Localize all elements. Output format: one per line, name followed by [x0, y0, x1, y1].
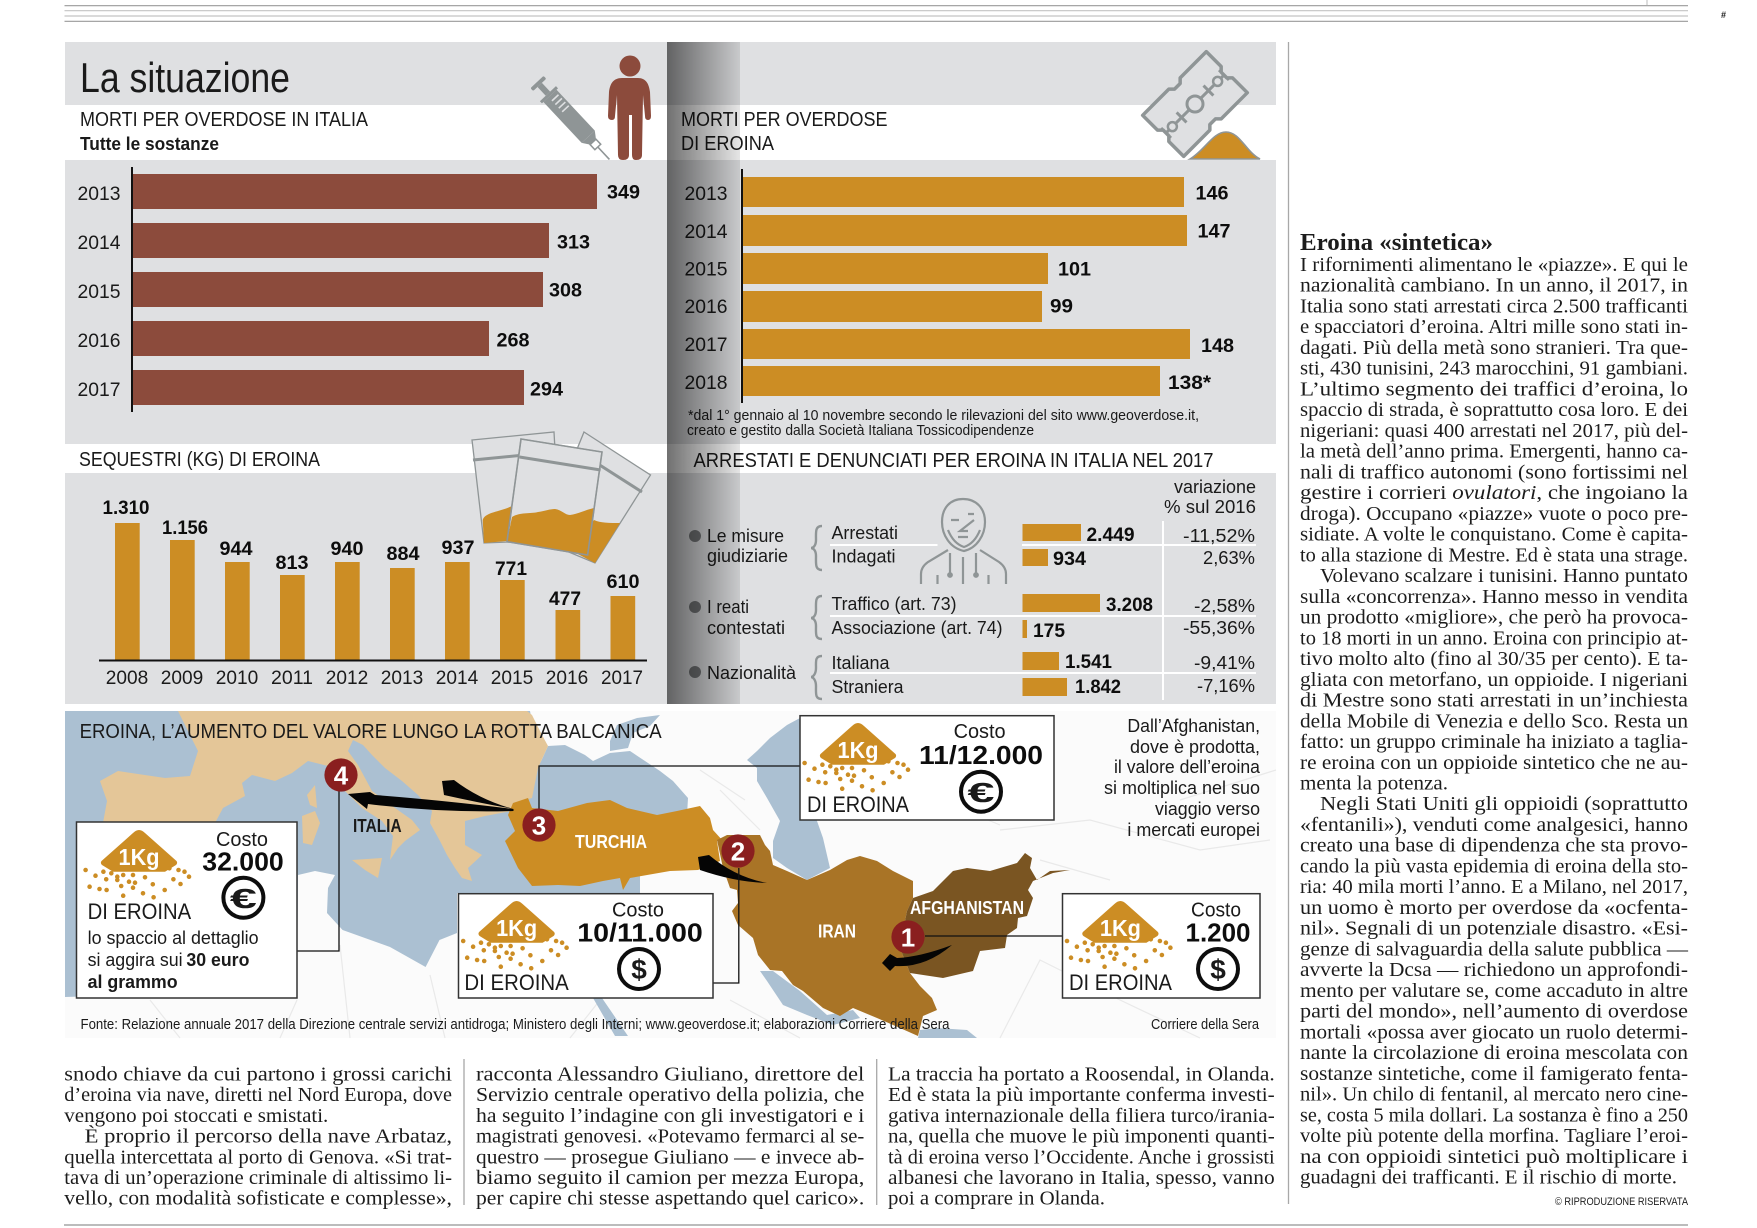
table: arrests bars and variations: 934: [1053, 549, 1086, 570]
article column 1: vello, con modalità sofisticate e complesse»,: [64, 1188, 452, 1210]
map explanatory text: Dall’Afghanistan,: [1127, 715, 1260, 736]
icon: powder pile: [463, 901, 567, 968]
icon: dollar: [619, 949, 659, 989]
article body: nil». Un chilo di fentanil, al mercato nero cine-: [1300, 1084, 1688, 1106]
article column 1: d’eroina via nave, diretti nel Nord Europa, dove: [64, 1084, 452, 1106]
article body: nil». Segnali di un potenziale disastro. «Esi-: [1300, 918, 1688, 940]
map explanatory text: il valore dell’eroina: [1114, 756, 1261, 777]
step markers: 2: [731, 836, 745, 866]
article body: sulla «concorrenza». Hanno messo in vendita: [1300, 586, 1688, 608]
heading: heroin deaths: [681, 109, 888, 155]
icon: euro: [223, 878, 263, 918]
icon: powder pile: 1Kg: [118, 844, 160, 870]
callout: Italy price: Costo: [216, 829, 268, 851]
legend: bullets and categories: Nazionalità: [707, 662, 797, 683]
bar chart: seizures: 2014: [436, 667, 478, 689]
icon: powder pile: 1Kg: [1100, 915, 1141, 941]
bar chart: deaths all substances: 308: [549, 280, 582, 302]
bar chart: deaths all substances: 294: [530, 380, 563, 400]
bar chart: deaths all substances: 349: [607, 182, 640, 204]
article column 1: [64, 1064, 452, 1210]
article column 1: tava di un’operazione criminale di altissimo li-: [64, 1167, 452, 1189]
article body: cando la più vasta epidemia di eroina della sto-: [1300, 856, 1688, 878]
bar chart: heroin deaths: 148: [1201, 336, 1234, 357]
article column 2: Servizio centrale operativo della polizia, che: [476, 1084, 864, 1106]
callout: Afghanistan price: Costo: [1191, 900, 1241, 922]
article column 4: [1300, 230, 1689, 1208]
copyright line: © RIPRODUZIONE RISERVATA: [1555, 1196, 1689, 1208]
land: Europe: [100, 711, 548, 881]
bar chart: heroin deaths: 2014: [684, 221, 728, 243]
country labels: AFGHANISTAN: [910, 898, 1024, 918]
article body: sostanze sintetiche, come il famigerato fenta-: [1300, 1063, 1688, 1085]
step markers: 4: [334, 760, 349, 790]
article body: mento per valutare se, come accaduto in altre: [1300, 980, 1688, 1002]
table: arrests bars and variations: 2.449: [1086, 525, 1134, 546]
bar chart: deaths all substances: 2016: [78, 330, 120, 352]
table: arrests bars and variations: -2,58%: [1194, 595, 1255, 616]
panel: background of the infographic: [65, 42, 1276, 704]
article body: nali di traffico autonomi (sono fortissimi nel: [1300, 461, 1688, 483]
map explanatory text: si moltiplica nel suo: [1104, 777, 1260, 798]
source line: Corriere della Sera: [1151, 1016, 1260, 1033]
article body: se, costa 5 mila dollari. La sostanza è fino a 250: [1300, 1104, 1688, 1126]
map explanatory text: viaggio verso: [1155, 798, 1260, 819]
article body: mortali «possa aver giocato un ruolo determi-: [1300, 1021, 1688, 1043]
article column 1: snodo chiave da cui partono i grossi carichi: [64, 1064, 452, 1086]
article body: «fentanili»), venduti come analgesici, hanno: [1300, 814, 1688, 836]
bar chart: seizures: 944: [220, 539, 253, 560]
article body: [1300, 254, 1689, 1189]
callout: Turkey price: [800, 716, 1054, 820]
icon: person: [608, 56, 651, 160]
article body: e spacciatori d’eroina. Altri mille sono stati in-: [1300, 316, 1688, 338]
article column 3: Ed è stata la più importante conferma investi-: [888, 1084, 1275, 1106]
article body: L’ultimo segmento dei traffici d’eroina, lo: [1300, 378, 1688, 400]
connector lines: [297, 766, 1062, 983]
callout: Turkey price: Costo: [954, 721, 1006, 743]
country labels: IRAN: [818, 922, 856, 942]
article body: la metà dell’anno prima. Emergenti, hanno ca-: [1300, 441, 1688, 463]
article body: droga). Occupano «piazze» vuote o poco pre-: [1300, 503, 1688, 525]
bar chart: heroin deaths: 2015: [684, 258, 728, 280]
heading: heroin deaths: MORTI PER OVERDOSE: [681, 109, 888, 131]
bar chart: seizures: 1.310: [102, 498, 150, 519]
step markers: 3: [532, 810, 546, 840]
icon: dollar: $: [631, 954, 647, 985]
callout: Afghanistan price: 1.200: [1186, 918, 1250, 948]
callout: Iran price: Costo: [612, 900, 664, 922]
article body: avverte la Dcsa — richiedono un approfondi-: [1300, 959, 1688, 981]
article column 2: questro — prosegue Giuliano — e invece ab-: [476, 1146, 864, 1168]
bar chart: heroin deaths: 147: [1198, 222, 1230, 242]
article body: parti del mondo», nell’aumento di overdose: [1300, 1001, 1688, 1023]
panel: deaths all substances: [78, 56, 651, 412]
callout: Afghanistan price: [1062, 894, 1260, 998]
article body: Negli Stati Uniti gli oppioidi (soprattutto: [1320, 793, 1688, 815]
bar chart: deaths all substances: 2014: [78, 232, 121, 254]
bar chart: seizures: 937: [442, 538, 474, 559]
bar chart: seizures: 2010: [216, 667, 258, 689]
footnote: [687, 407, 1199, 439]
step markers: [324, 758, 925, 954]
table: arrests bars and variations: 2,63%: [1203, 547, 1255, 568]
article column 2: racconta Alessandro Giuliano, direttore del: [476, 1064, 865, 1086]
legend: bullets and categories: giudiziarie: [707, 545, 788, 566]
table: arrests bars and variations: -9,41%: [1194, 652, 1255, 673]
article body: gliata con metorfano, un oppioide. I nigeriani: [1300, 669, 1688, 691]
sea: Caspian: [747, 718, 830, 880]
bar chart: seizures: 2012: [326, 667, 368, 689]
table: arrests bars and variations: -7,16%: [1197, 675, 1255, 696]
bar chart: seizures: [99, 498, 647, 689]
table: arrests bars and variations: 1.842: [1075, 677, 1121, 698]
callout: Iran price: 10/11.000: [577, 918, 703, 948]
legend: bullets and categories: contestati: [707, 617, 785, 638]
bar chart: seizures: 771: [495, 559, 527, 580]
table: arrests bars and variations: 1.541: [1065, 652, 1112, 673]
callout: Iran price: DI EROINA: [464, 970, 569, 995]
bar chart: deaths all substances: 2017: [78, 379, 120, 401]
icon: powder pile: 1Kg: [838, 737, 878, 763]
article body: gestire i corrieri ovulatori , che ingoiano la: [1300, 482, 1688, 504]
bar chart: seizures: 2011: [271, 667, 313, 689]
callout: Italy price: 30 euro: [186, 949, 249, 970]
bar chart: deaths all substances: 268: [496, 330, 530, 352]
article column 2: [476, 1064, 865, 1210]
article body: re eroina con un oppioide sintetico che ne au-: [1300, 752, 1688, 774]
icon: razor blade: [1143, 52, 1260, 159]
land: Iran: [717, 835, 937, 1036]
panel: heroin deaths: [681, 52, 1260, 439]
footnote: *dal 1° gennaio al 10 novembre secondo le rilevazioni del sito www.geoverdose.it,: [688, 407, 1199, 424]
land: Turkey: [505, 798, 723, 890]
heading: arrests: ARRESTATI E DENUNCIATI PER EROINA IN ITALIA NEL 2017: [694, 450, 1214, 472]
callout: Iran price: [458, 894, 713, 998]
panel: map of the Balkan route: [65, 711, 1276, 1038]
heading: deaths in Italy: [80, 109, 369, 154]
table: arrests bars and variations: 3.208: [1106, 595, 1153, 616]
callout: Italy price: 32.000: [202, 847, 284, 877]
icon: euro: €: [968, 777, 995, 808]
callout: Turkey price: DI EROINA: [807, 792, 909, 817]
map heading: EROINA, L’AUMENTO DEL VALORE LUNGO LA ROTTA BALCANICA: [80, 721, 662, 743]
article body: della Mobile di Venezia e dello Sco. Resta un: [1300, 710, 1688, 732]
bar chart: seizures: 2013: [381, 667, 423, 689]
map explanatory text: dove è prodotta,: [1130, 736, 1260, 757]
article body: Volevano scalzare i tunisini. Hanno puntato: [1320, 565, 1688, 587]
article body: sidiate. A volte le conquistano. Come è capita-: [1300, 524, 1688, 546]
article body: to 18 morti in un anno. Eroina con principio at-: [1300, 627, 1688, 649]
icon: powder pile: [1067, 901, 1170, 968]
bar chart: heroin deaths: 138*: [1168, 373, 1212, 394]
panel fold shadow: [667, 42, 740, 704]
icon: syringe: [529, 74, 617, 167]
article heading: Eroina «sintetica»: [1300, 230, 1493, 256]
callout: Turkey price: 11/12.000: [919, 740, 1043, 770]
arrows: [348, 780, 952, 971]
article column 2: biamo seguito il camion per mezza Europa,: [476, 1167, 864, 1189]
heading: heroin deaths: DI EROINA: [681, 133, 775, 155]
article column 3: La traccia ha portato a Roosendal, in Olanda.: [888, 1064, 1275, 1086]
table: arrests bars and variations: 175: [1033, 621, 1065, 642]
article body: sti, 430 tunisini, 243 marocchini, 91 gambiani.: [1300, 358, 1688, 380]
callout: Italy price: si aggira sui: [88, 949, 183, 970]
panel: seizures: [79, 432, 650, 689]
panel: arrests: [689, 450, 1256, 700]
bar chart: heroin deaths: 2018: [684, 372, 728, 394]
step markers: 1: [901, 922, 915, 952]
bar chart: heroin deaths: [684, 169, 1234, 403]
table: arrests bars and variations: [832, 476, 1256, 698]
article column 1: È proprio il percorso della nave Arbataz,: [85, 1125, 452, 1148]
callout: Italy price: DI EROINA: [88, 899, 191, 924]
table: arrests bars and variations: Italiana: [832, 652, 890, 673]
icon: euro: [961, 772, 1001, 812]
table: arrests bars and variations: Arrestati: [832, 522, 898, 543]
article body: un prodotto «migliore», che però ha provoca-: [1300, 607, 1688, 629]
article body: guadagni dei trafficanti. E il rischio di morte.: [1300, 1167, 1677, 1189]
article column 2: per capire chi stesse aspettando quel carico».: [476, 1188, 864, 1210]
bar chart: seizures: 2016: [546, 667, 588, 689]
callout: Italy price: lo spaccio al dettaglio: [88, 927, 259, 948]
bar chart: deaths all substances: 313: [557, 232, 590, 254]
icon: euro: €: [230, 883, 258, 914]
bar chart: heroin deaths: 2016: [684, 296, 728, 318]
footnote: creato e gestito dalla Società Italiana Tossicodipendenze: [687, 422, 1034, 439]
article body: na con oppioidi sintetici può moltiplicare i: [1300, 1146, 1688, 1168]
callout: Italy price: [76, 822, 297, 998]
table: arrests bars and variations: Associazione (art. 74): [832, 617, 1002, 638]
bar chart: deaths all substances: 2015: [78, 281, 121, 303]
article body: Italia sono stati arrestati circa 2.500 trafficanti: [1300, 296, 1688, 318]
article body: genze di salvaguardia della salute pubblica —: [1300, 938, 1689, 960]
bar chart: heroin deaths: 146: [1196, 184, 1228, 204]
country labels: ITALIA: [353, 816, 402, 836]
icon: powder pile: [86, 830, 189, 897]
table: arrests bars and variations: variazione: [1174, 476, 1256, 497]
article column 2: ha seguito l’indagine con gli investigatori e i: [476, 1105, 865, 1127]
bar chart: heroin deaths: 99: [1050, 296, 1073, 318]
map explanatory text: [1104, 715, 1261, 840]
bar chart: seizures: 610: [606, 572, 640, 593]
bar chart: heroin deaths: 2017: [684, 334, 728, 356]
legend: bullets and categories: I reati: [707, 596, 749, 617]
article body: nigeriani: quasi 400 arrestati nel 2017, più del-: [1300, 420, 1688, 442]
bar chart: seizures: 477: [549, 589, 581, 610]
article body: nazionalità cambiano. In un anno, il 2017, in: [1300, 275, 1688, 297]
bar chart: heroin deaths: 101: [1058, 260, 1091, 280]
bar chart: deaths all substances: 2013: [78, 183, 120, 205]
table: arrests bars and variations: -55,36%: [1183, 617, 1255, 638]
bar chart: seizures: 1.156: [162, 518, 208, 539]
article body: I rifornimenti alimentano le «piazze». E qui le: [1300, 254, 1688, 276]
heading: deaths in Italy: Tutte le sostanze: [80, 134, 219, 154]
icon: powder pile: 1Kg: [496, 915, 537, 941]
bar chart: deaths all substances: [78, 167, 640, 412]
table: arrests bars and variations: Traffico (art. 73): [832, 593, 956, 614]
heading: seizures: SEQUESTRI (KG) DI EROINA: [79, 449, 321, 471]
article body: to alla stazione di Mestre. Ed è stata una strage.: [1300, 544, 1688, 566]
bar chart: heroin deaths: 2013: [684, 183, 728, 205]
legend: bullets and categories: [689, 525, 822, 699]
article body: fatto: un gruppo criminale ha iniziato a taglia-: [1300, 731, 1688, 753]
bar chart: seizures: 2015: [491, 667, 533, 689]
bar chart: seizures: 2009: [161, 667, 203, 689]
article column 3: albanesi che lavorano in Italia, spesso, vanno: [888, 1167, 1275, 1189]
article body: menta la potenza.: [1300, 772, 1448, 794]
article column 3: tà di eroina verso l’Occidente. Anche i grossisti: [888, 1146, 1275, 1168]
article body: spaccio di strada, è soprattutto cosa loro. E dei: [1300, 399, 1688, 421]
article body: volte più potente della morfina. Tagliare l’eroi-: [1300, 1125, 1688, 1147]
article column 3: [888, 1064, 1275, 1210]
table: arrests bars and variations: -11,52%: [1183, 525, 1255, 546]
article column 3: poi a comprare in Olanda.: [888, 1188, 1105, 1210]
article column 1: vengono poi stoccati e smistati.: [64, 1105, 328, 1127]
article body: nante la circolazione di eroina mescolata con: [1300, 1042, 1688, 1064]
article column 1: quella intercettata al porto di Genova. «Si trat-: [64, 1146, 452, 1168]
sea: Gulf and Red Sea: [593, 971, 977, 1038]
source line: Fonte: Relazione annuale 2017 della Direzione centrale servizi antidroga; Ministero degli Interni; www.geoverdose.it; elaborazioni Corriere della Sera: [80, 1016, 950, 1033]
article body: creato una base di dipendenza che sta provo-: [1300, 835, 1688, 857]
sea: Black Sea: [532, 745, 688, 815]
article column 2: magistrati genovesi. «Potevamo fermarci al se-: [476, 1126, 864, 1148]
icon: hooded figure: [921, 499, 1006, 584]
map explanatory text: i mercati europei: [1127, 819, 1260, 840]
article body: un uomo è morto per overdose da «ocfenta-: [1300, 897, 1688, 919]
table: arrests bars and variations: Straniera: [832, 676, 904, 697]
bar chart: seizures: 2008: [106, 667, 148, 689]
icon: powder pile: [805, 723, 908, 790]
table: arrests bars and variations: % sul 2016: [1164, 496, 1256, 517]
country labels: [353, 816, 1024, 942]
icon: dollar: [1198, 949, 1238, 989]
sea: Azov: [610, 715, 660, 751]
table: arrests bars and variations: Indagati: [832, 546, 896, 566]
heading: deaths in Italy: MORTI PER OVERDOSE IN ITALIA: [80, 109, 369, 131]
callout: Afghanistan price: DI EROINA: [1069, 970, 1172, 995]
article body: di Mestre sono stati arrestati in un’inchiesta: [1300, 690, 1688, 712]
bar chart: seizures: 884: [386, 544, 420, 565]
bar chart: seizures: 813: [276, 553, 308, 574]
icon: heroin bags: [472, 432, 650, 563]
article body: tivo molto alto (fino al 30/35 per cento). E ta-: [1300, 648, 1688, 670]
article column 3: na, quella che muove le più imponenti quanti-: [888, 1126, 1275, 1148]
article column 3: gativa internazionale della filiera turco/irania-: [888, 1105, 1275, 1127]
sea: Mediterranean: [65, 711, 640, 997]
bar chart: seizures: 2017: [601, 667, 643, 689]
icon: dollar: $: [1210, 954, 1226, 985]
article body: dagati. Più della metà sono stranieri. Tra que-: [1300, 337, 1688, 359]
legend: bullets and categories: Le misure: [707, 525, 784, 546]
country labels: TURCHIA: [575, 832, 647, 852]
land: Afghanistan: [900, 853, 1070, 978]
article body: ria: 40 mila morti l’anno. E a Milano, nel 2017,: [1300, 876, 1688, 898]
callout: Italy price: al grammo: [88, 971, 178, 992]
bar chart: seizures: 940: [330, 539, 364, 560]
title: La situazione: [80, 54, 290, 101]
text: #: [1721, 10, 1726, 20]
